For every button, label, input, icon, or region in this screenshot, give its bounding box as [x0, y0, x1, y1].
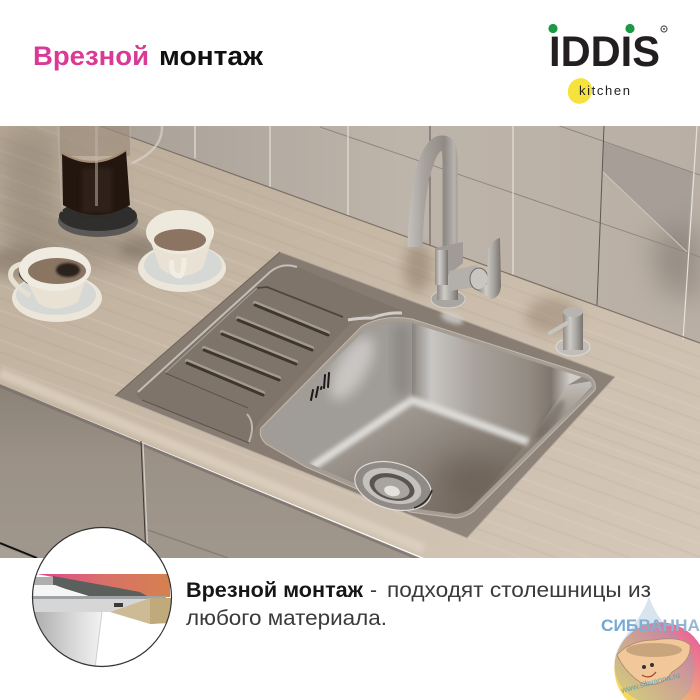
sink rim — [34, 577, 53, 585]
logo: iddis kitchen: kitchen — [579, 83, 630, 98]
handle — [478, 238, 501, 299]
bowl rim highlight — [260, 318, 595, 518]
overflow slots — [311, 373, 329, 400]
sink side — [30, 599, 147, 612]
sink flange — [115, 252, 615, 538]
spout — [415, 143, 450, 250]
logo: iddis kitchen — [548, 24, 667, 108]
title — [33, 41, 264, 71]
cabinet fronts — [0, 384, 424, 570]
coffee press — [58, 126, 162, 237]
watermark: sibvanna — [601, 598, 700, 700]
description text: подходят столешницы из — [387, 579, 651, 602]
watermark url: www.sibvanna.ru — [619, 671, 681, 695]
drainboard ribs — [187, 303, 328, 395]
drain — [354, 460, 433, 512]
description text: Врезной монтаж — [186, 579, 364, 602]
title: монтаж — [159, 41, 264, 71]
base — [431, 290, 465, 308]
watermark colour blob — [614, 622, 700, 700]
watermark drop — [615, 598, 694, 700]
logo: iddis kitchen: IDDIS — [549, 28, 660, 76]
bowl interior — [264, 322, 592, 514]
arm — [449, 265, 477, 291]
cup right — [138, 210, 226, 292]
description text: любого материала. — [186, 607, 387, 630]
inset circle: cross-section of mounting — [30, 528, 172, 668]
bowl wall — [34, 612, 102, 666]
description text — [186, 579, 651, 630]
sink — [115, 252, 615, 538]
photo: kitchen sink scene — [0, 120, 700, 570]
wall tiles — [100, 125, 700, 343]
countertop top surface — [37, 574, 170, 597]
watermark bath mascot — [617, 639, 690, 684]
title: Врезной — [33, 41, 149, 71]
cup left — [11, 247, 102, 322]
countertop — [0, 120, 700, 558]
description text: - — [370, 579, 377, 602]
drainboard recess — [138, 264, 372, 444]
faucet — [404, 143, 501, 308]
watermark name: СИБВАННА — [601, 616, 700, 635]
body — [435, 242, 463, 275]
stone chip — [110, 598, 166, 624]
soap dispenser — [526, 298, 590, 356]
